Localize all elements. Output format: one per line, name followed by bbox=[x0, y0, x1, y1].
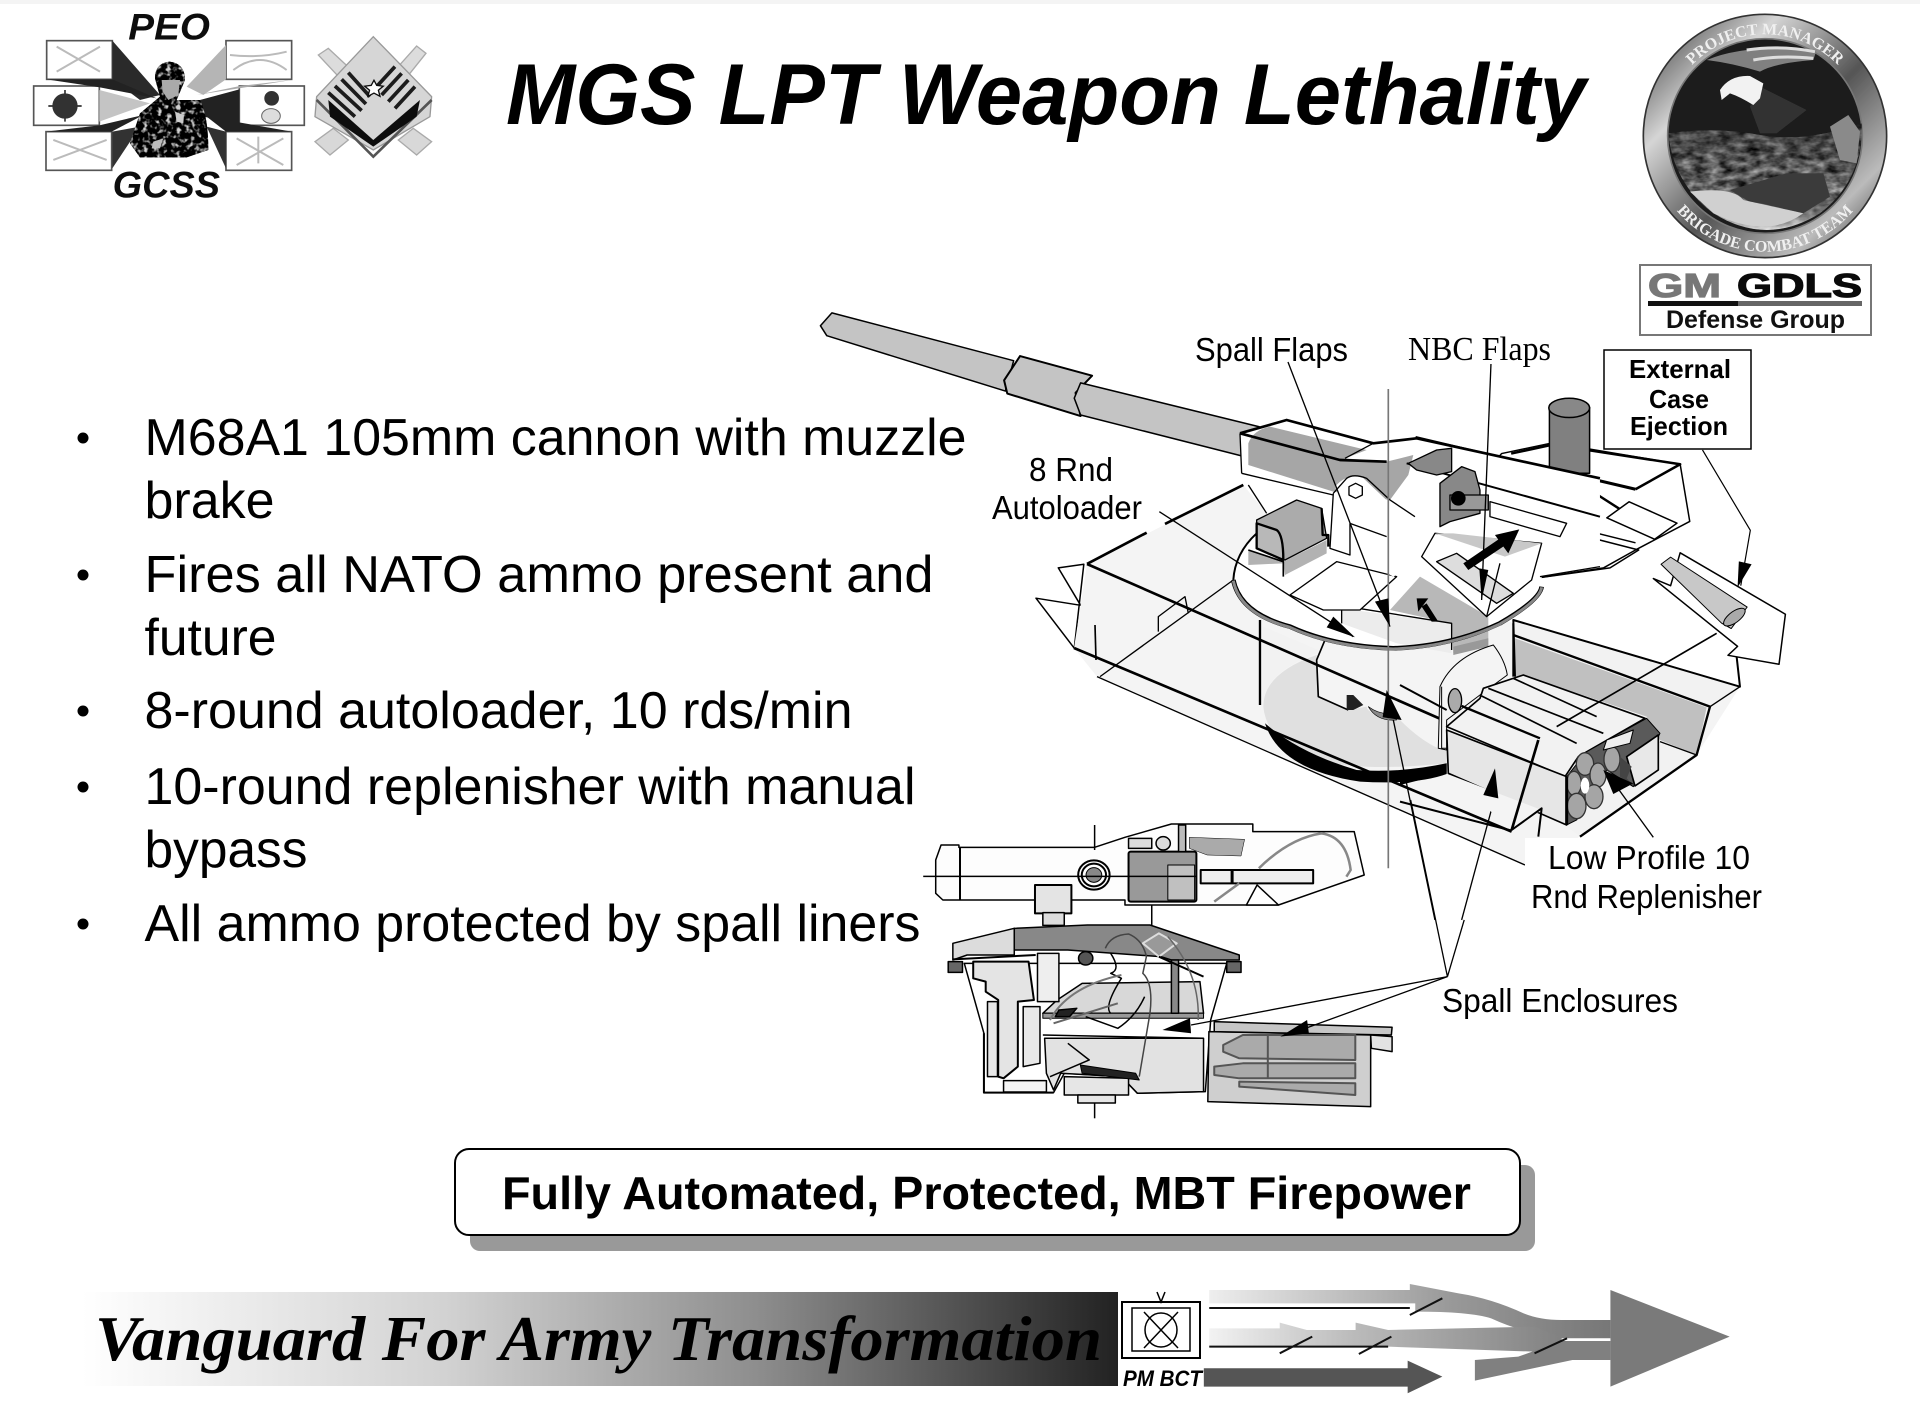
spall enclosure leaders bbox=[1191, 800, 1464, 1032]
logo: project manager seal bbox=[1642, 14, 1888, 258]
replenisher arrow and leaders bbox=[1400, 763, 1653, 837]
Defense Group: Defense Group bbox=[1666, 306, 1845, 334]
bullet 3: 8-round autoloader, 10 rds/min bbox=[144, 682, 852, 740]
seal ring text bottom: BRIGADE COMBAT TEAM bbox=[1676, 204, 1854, 252]
title: MGS LPT Weapon Lethality bbox=[506, 47, 1590, 143]
bullet 4: 10-round replenisher with manual bbox=[144, 758, 916, 816]
external case leader bbox=[1702, 450, 1752, 587]
callout: External Case Ejection bbox=[1604, 350, 1751, 449]
basket base disc bbox=[1260, 620, 1447, 782]
center line bbox=[1386, 389, 1391, 868]
diagram: replenisher magazine bbox=[1400, 620, 1740, 837]
seal ring text top: PROJECT MANAGER bbox=[1685, 24, 1843, 66]
label: NBC Flaps: NBC Flaps bbox=[1408, 331, 1551, 368]
bottom arrow bbox=[1204, 1361, 1442, 1393]
branch insignia boxes bbox=[34, 41, 304, 170]
seal landscape bbox=[1668, 123, 1862, 230]
callout: External Case Ejection: External bbox=[1629, 354, 1731, 384]
exhaust stack bbox=[1549, 398, 1590, 473]
turret ring top bbox=[1233, 513, 1542, 655]
arrows: converging forces bbox=[1204, 1284, 1730, 1393]
middle arrow bbox=[1209, 1323, 1567, 1352]
callout: External Case Ejection: Case bbox=[1649, 384, 1709, 414]
GM wordmark: GM bbox=[1648, 267, 1721, 304]
bullet 1 bbox=[78, 409, 966, 530]
label: Low Profile 10 Rnd Replenisher: Low Profile 10 bbox=[1548, 839, 1750, 876]
spall enclosure arrows bbox=[1162, 1018, 1309, 1037]
large arrowhead bbox=[1610, 1290, 1730, 1387]
logo: PEO GCSS bbox=[34, 5, 304, 205]
seal flag bbox=[1707, 48, 1817, 72]
turret deck bbox=[953, 925, 1239, 1013]
PEO label: PEO bbox=[128, 5, 210, 47]
mantlet and roof bbox=[1240, 420, 1600, 617]
diagram: turret rear, stack, barrel and ejected case bbox=[820, 313, 1785, 664]
insignia glyphs bbox=[53, 47, 287, 165]
seal eagle bbox=[1750, 87, 1807, 133]
bullet 2 bbox=[78, 546, 934, 667]
hull cross section bbox=[948, 952, 1241, 1118]
periscope box and support bbox=[1035, 885, 1152, 926]
bullet 1: M68A1 105mm cannon with muzzle bbox=[144, 409, 966, 467]
lower merging branch bbox=[1475, 1341, 1610, 1381]
PM BCT text: PM BCT bbox=[1123, 1366, 1203, 1391]
label: Spall Enclosures: Spall Enclosures bbox=[1442, 982, 1678, 1019]
GDLS wordmark: GDLS bbox=[1737, 267, 1862, 304]
perspective rays bbox=[46, 41, 292, 168]
arrowheads bbox=[1327, 529, 1519, 720]
diagram: hull deck and turret basket bbox=[1074, 362, 1740, 920]
label: 8 Rnd Autoloader: 8 Rnd bbox=[1029, 451, 1113, 488]
label: Low Profile 10 Rnd Replenisher bbox=[1525, 838, 1770, 916]
callout: Fully Automated, Protected, MBT Firepower: Fully Automated, Protected, MBT Firepower bbox=[502, 1167, 1471, 1219]
bullet 2: Fires all NATO ammo present and bbox=[144, 546, 934, 604]
replenisher section bbox=[1208, 1022, 1392, 1107]
label: 8 Rnd Autoloader bbox=[992, 451, 1142, 526]
turret rear roof bbox=[1415, 437, 1690, 579]
gun barrel bbox=[820, 313, 1259, 457]
hull edge lines bbox=[1074, 485, 1525, 865]
bullet list bbox=[78, 409, 966, 953]
rear hull shading bbox=[1513, 620, 1740, 837]
logo: GM GDLS Defense Group bbox=[1640, 265, 1871, 335]
banner: Vanguard For Army Transformation: Vanguard For Army Transformation bbox=[95, 1303, 1102, 1374]
bullet 4: bypass bbox=[144, 821, 308, 879]
diagram: side section view bbox=[923, 800, 1464, 1118]
GCSS label: GCSS bbox=[113, 163, 220, 205]
callout: External Case Ejection: Ejection bbox=[1630, 411, 1728, 441]
magazine body bbox=[1400, 633, 1717, 837]
hull deck fill bbox=[1074, 485, 1740, 865]
label: 8 Rnd Autoloader: Autoloader bbox=[992, 489, 1142, 526]
bullet 4 bbox=[78, 758, 916, 879]
label: Spall Flaps: Spall Flaps bbox=[1195, 331, 1348, 368]
crew figure bbox=[1050, 934, 1198, 1077]
label: Low Profile 10 Rnd Replenisher: Rnd Replenisher bbox=[1531, 878, 1762, 915]
bullet 5: All ammo protected by spall liners bbox=[144, 895, 920, 953]
left hull wedges bbox=[1036, 564, 1084, 648]
bullet 1: brake bbox=[144, 472, 274, 530]
bullet 2: future bbox=[144, 609, 276, 667]
turret side casting bbox=[1438, 645, 1507, 750]
right hull stub bbox=[1510, 623, 1516, 677]
logo: unit crest bbox=[315, 37, 432, 157]
ejected case bbox=[1653, 553, 1785, 664]
soldier figure bbox=[130, 62, 208, 157]
top arrow bbox=[1209, 1284, 1610, 1338]
icon: PM BCT unit symbol bbox=[1122, 1292, 1203, 1391]
magazine end with hex tubes bbox=[1567, 718, 1660, 825]
autoloader block bbox=[1248, 500, 1328, 577]
thin leaders bbox=[1159, 362, 1495, 920]
turret upper section bbox=[923, 824, 1364, 905]
callout: Fully Automated, Protected, MBT Firepower bbox=[455, 1149, 1535, 1251]
